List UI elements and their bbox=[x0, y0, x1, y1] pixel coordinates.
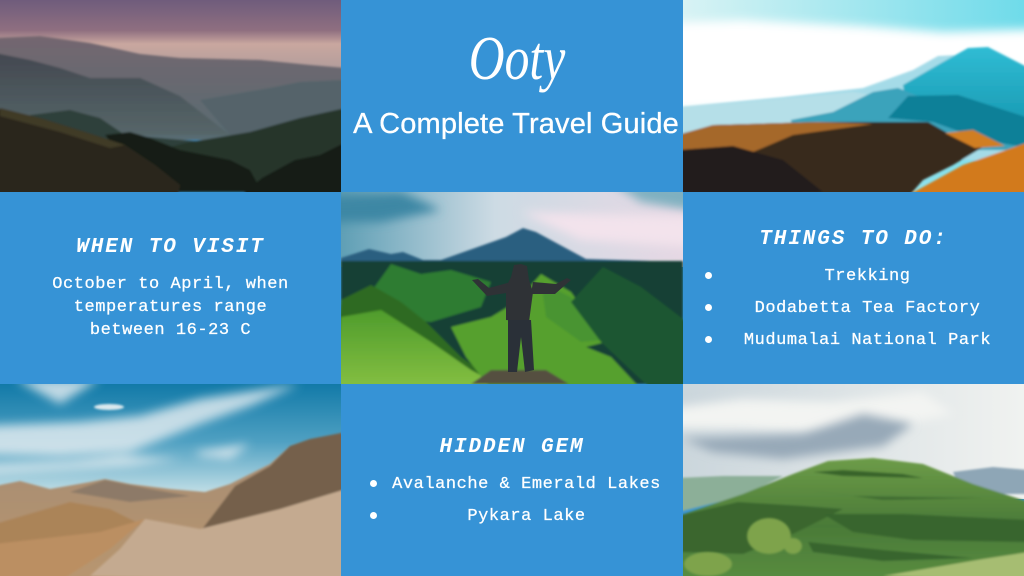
list: activities: Dodabetta Tea Factory bbox=[755, 299, 980, 318]
text: visit details bbox=[52, 275, 289, 340]
photo: misty purple mountains bbox=[0, 0, 341, 192]
list: activities: Trekking bbox=[824, 267, 910, 286]
photo: blue sky over rocky desert mountains bbox=[0, 384, 341, 576]
list: lakes: Avalanche & Emerald Lakes bbox=[392, 475, 661, 494]
heading: when to visit: WHEN TO VISIT bbox=[76, 236, 265, 259]
photo: volcano and orange hills bbox=[683, 0, 1024, 192]
title: A Complete Travel Guide: A Complete Travel Guide bbox=[353, 108, 679, 140]
icon: person silhouette with raised arms bbox=[472, 264, 571, 372]
list: lakes bbox=[370, 475, 661, 526]
heading: hidden gem: HIDDEN GEM bbox=[439, 436, 585, 459]
photo: green terraced hill bbox=[683, 384, 1024, 576]
text: visit details: October to April, when bbox=[52, 275, 289, 294]
panel: things to do bbox=[705, 228, 991, 350]
list: lakes: Pykara Lake bbox=[467, 507, 586, 526]
panel: hidden gem bbox=[370, 436, 661, 526]
text: visit details: between 16-23 C bbox=[90, 321, 251, 340]
list: activities: Mudumalai National Park bbox=[744, 331, 991, 350]
text: visit details: temperatures range bbox=[74, 298, 267, 317]
heading: things to do: THINGS TO DO: bbox=[759, 228, 948, 251]
title script: Ooty: Ooty bbox=[469, 25, 565, 93]
list: activities bbox=[705, 267, 991, 350]
panel: when to visit bbox=[52, 236, 289, 340]
photo: person facing green hills and volcano bbox=[341, 192, 683, 384]
